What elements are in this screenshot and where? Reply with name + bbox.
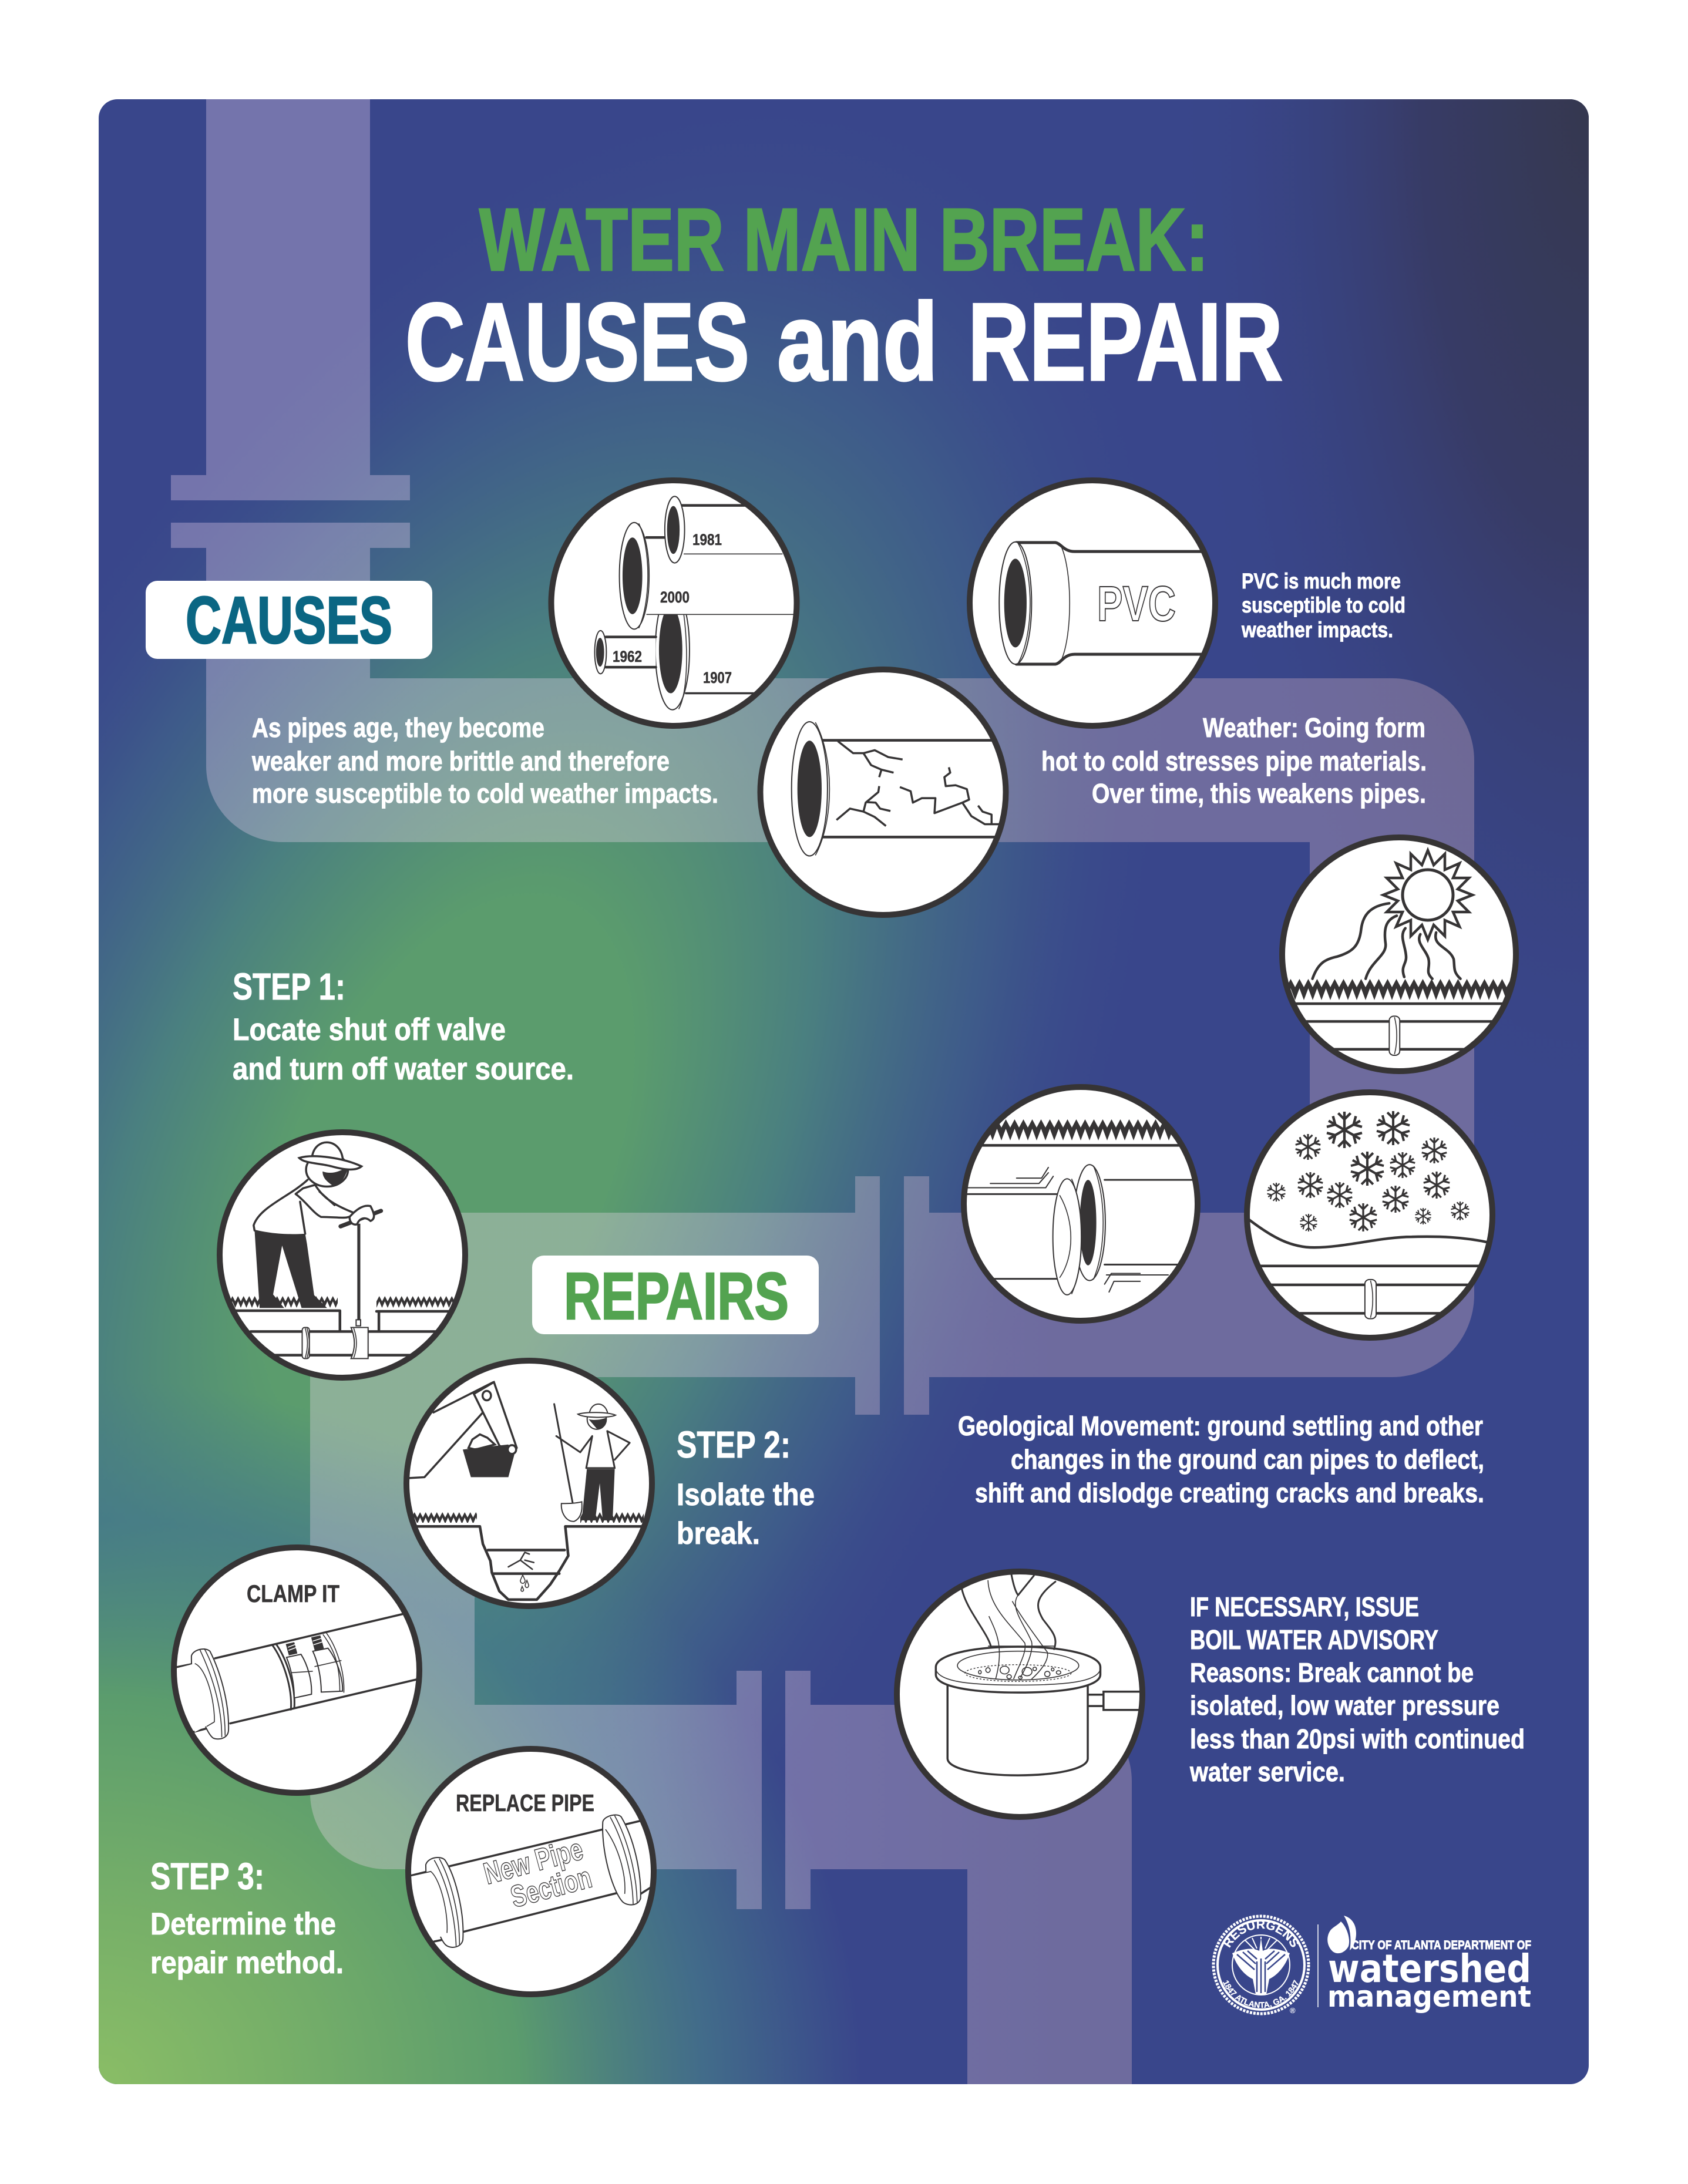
label: replace pipe: REPLACE PIPE <box>456 1789 594 1816</box>
text: geological movement: shift and dislodge creating cracks and breaks. <box>975 1478 1484 1508</box>
labels: installation years: 1981 <box>692 531 722 548</box>
text: boil water advisory: Reasons: Break cannot be <box>1190 1657 1474 1688</box>
sun <box>1383 850 1472 940</box>
label: clamp it: CLAMP IT <box>247 1580 339 1607</box>
labels: installation years: 2000 <box>660 588 690 606</box>
text: pipe age explanation: weaker and more brittle and therefore <box>251 746 670 776</box>
text: PVC note <box>1241 569 1405 642</box>
icon: cracked pipe <box>760 669 1006 915</box>
labels: installation years: 1907 <box>703 669 732 687</box>
label: new pipe section outlined lettering: Section <box>507 1860 596 1914</box>
text: step 3: STEP 3: <box>150 1855 264 1897</box>
labels: installation years: 1962 <box>613 648 642 665</box>
text: pipe age explanation: As pipes age, they become <box>252 712 544 743</box>
label: new pipe section outlined lettering: New Pipe <box>480 1832 587 1892</box>
icon: boiling pot of water <box>897 1571 1151 1817</box>
text: boil water advisory: less than 20psi with continued <box>1190 1724 1525 1754</box>
seal eagle <box>1232 1938 1290 1994</box>
icon: worker turning shut off valve <box>220 1132 465 1378</box>
text: geological movement <box>958 1411 1484 1508</box>
logo: City of Atlanta seal: ® <box>1290 2006 1296 2015</box>
snowflakes <box>1266 1111 1470 1231</box>
icon: sun heating ground over pipe <box>1277 837 1521 1071</box>
text: step 1: Locate shut off valve <box>233 1012 506 1047</box>
icon: pipe joint slipping from ground movement <box>962 1087 1198 1321</box>
icon: pipes of different ages <box>551 480 798 726</box>
icon: PVC pipe <box>970 480 1221 726</box>
text: step 3: Determine the <box>150 1907 336 1941</box>
title line 2: REPAIR <box>968 280 1283 403</box>
title line 2: CAUSES <box>405 280 749 403</box>
text: PVC note: susceptible to cold <box>1242 593 1405 617</box>
text: step 2: break. <box>677 1516 760 1551</box>
text: geological movement: changes in the ground can pipes to deflect, <box>1011 1444 1484 1475</box>
text: step 1: STEP 1: <box>233 965 345 1008</box>
icon: excavator and worker digging to isolate break <box>406 1361 652 1606</box>
logo: City of Atlanta seal: 1847 ATLANTA, GA. 1847 <box>1223 1980 1299 2008</box>
label: new pipe section outlined lettering <box>480 1832 596 1920</box>
title line 1: WATER MAIN BREAK: <box>479 190 1209 289</box>
text: PVC note: PVC is much more <box>1242 569 1401 593</box>
text: pipe age explanation: more susceptible to cold weather impacts. <box>252 778 718 809</box>
text: boil water advisory: isolated, low water pressure <box>1190 1690 1499 1721</box>
pipe network: causes pipe from top through the weather elbow <box>171 99 1474 1415</box>
icon: snow over ground and pipe <box>1245 1092 1492 1338</box>
text: step 1 <box>233 965 574 1086</box>
text: step 3 <box>150 1855 344 1980</box>
text: weather explanation: Over time, this weakens pipes. <box>1092 778 1426 809</box>
pipe network: outflow pipe to bottom edge <box>785 1671 1132 2084</box>
labels: installation years <box>613 531 732 687</box>
text: step 2 <box>677 1424 815 1551</box>
text: boil water advisory: BOIL WATER ADVISORY <box>1190 1624 1438 1655</box>
logo: City of Atlanta seal <box>1212 1914 1310 2015</box>
text: PVC note: weather impacts. <box>1241 618 1393 642</box>
title line 2 <box>405 280 1283 403</box>
icon: clamp on pipe <box>174 1547 419 1793</box>
logo: watershed management wordmark: management <box>1327 1980 1531 2014</box>
text: pipe age explanation <box>251 712 718 809</box>
text: step 3: repair method. <box>150 1946 344 1980</box>
text: geological movement: Geological Movement: ground settling and other <box>958 1411 1483 1441</box>
logo leaf and water drop <box>1327 1916 1356 1953</box>
text: step 1: and turn off water source. <box>233 1052 574 1086</box>
pipe network: repairs pipe section <box>310 1176 880 1909</box>
logo: watershed management wordmark <box>1318 1916 1531 2014</box>
icon: replacement pipe section <box>408 1749 654 1994</box>
title line 2: and <box>777 280 938 403</box>
logo: watershed management wordmark: watershed <box>1328 1946 1531 1991</box>
badge: repairs: REPAIRS <box>564 1259 789 1333</box>
text: step 2: Isolate the <box>677 1478 815 1512</box>
text: weather explanation: hot to cold stresses pipe materials. <box>1041 746 1427 776</box>
text: step 2: STEP 2: <box>677 1424 791 1466</box>
text: weather explanation: Weather: Going form <box>1203 712 1425 743</box>
text: boil water advisory: water service. <box>1189 1756 1345 1787</box>
text: boil water advisory: IF NECESSARY, ISSUE <box>1190 1591 1419 1622</box>
logo: watershed management wordmark: CITY OF ATLANTA DEPARTMENT OF <box>1351 1939 1531 1952</box>
label: PVC outlined lettering: PVC <box>1097 576 1176 631</box>
seal text: RESURGENS <box>1224 1921 1298 1948</box>
text: boil water advisory <box>1189 1591 1525 1787</box>
text: weather explanation <box>1041 712 1427 809</box>
title <box>405 190 1283 403</box>
badge: causes: CAUSES <box>186 583 392 657</box>
